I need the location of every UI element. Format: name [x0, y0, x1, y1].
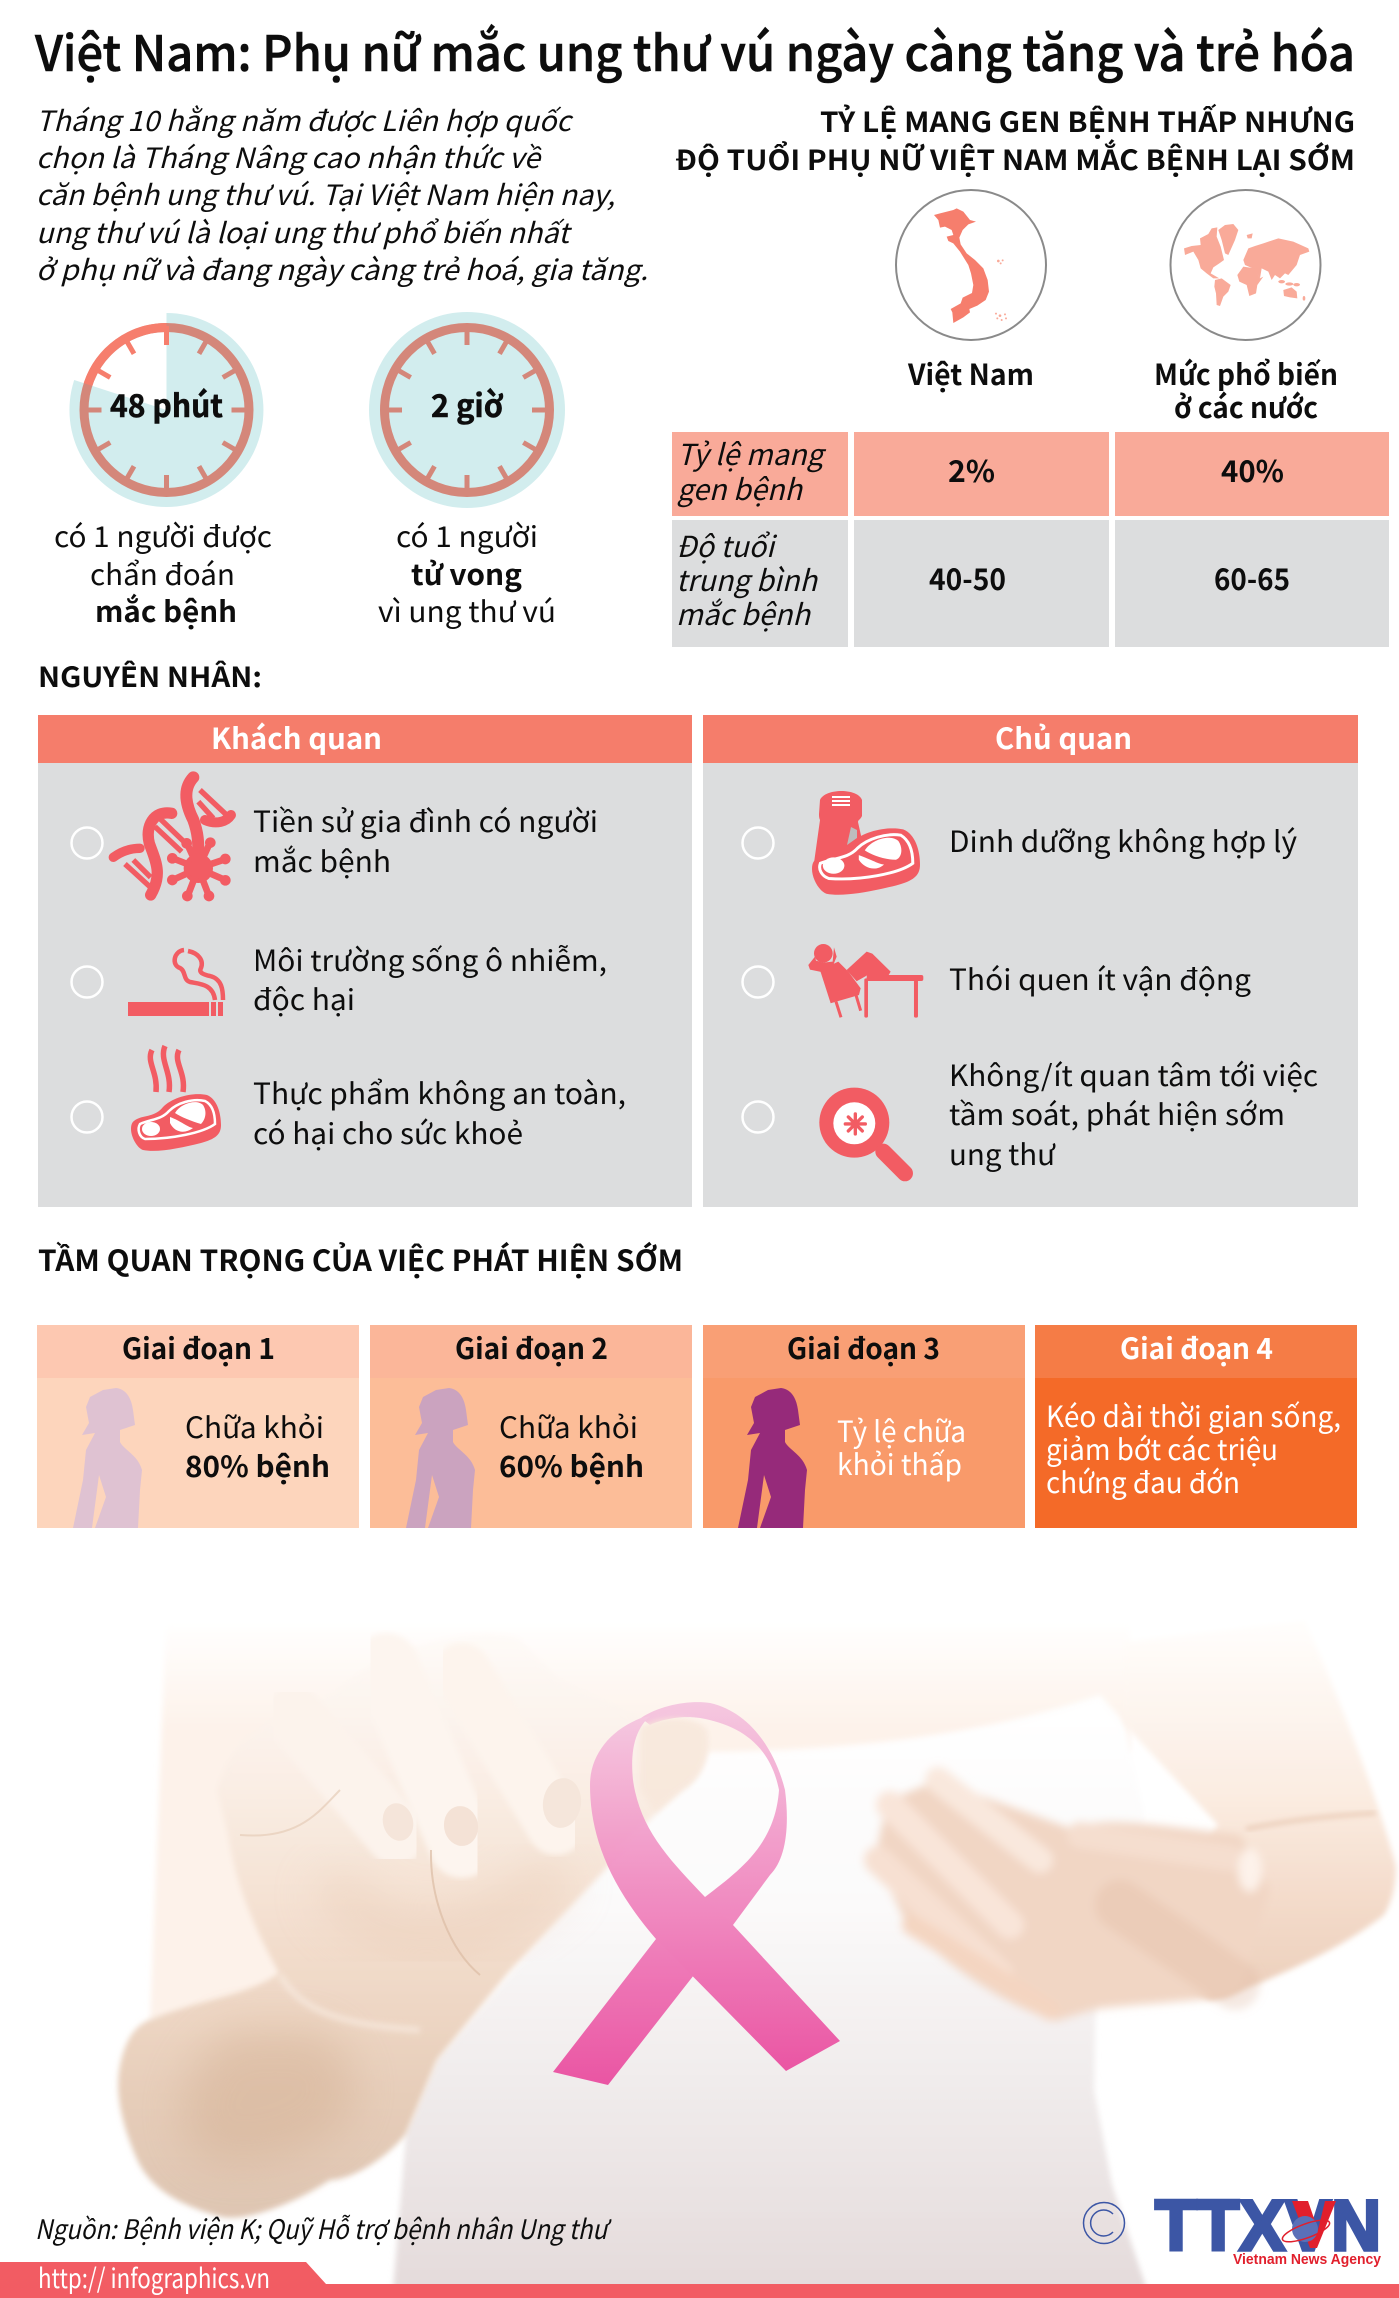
- row: gene rate: Tỷ lệ mang: [677, 432, 827, 474]
- intro text block: Tháng 10 hằng năm được Liên hợp quốc: [36, 100, 574, 140]
- footer bar with url tab: http:// infographics.vn: [38, 2257, 270, 2296]
- row: average age: mắc bệnh: [676, 592, 811, 634]
- panel: stage 2: 60% bệnh: [499, 1444, 644, 1486]
- icon: hot steak: [131, 1046, 221, 1151]
- caption: 2 hours: tử vong: [411, 552, 522, 594]
- causes text: Thực phẩm không an toàn,: [253, 1071, 626, 1113]
- panel: stage 2: [370, 1325, 692, 1528]
- intro text block: [36, 100, 648, 289]
- causes text: Không/ít quan tâm tới việc: [949, 1053, 1318, 1095]
- icon: person lounging at desk: [808, 944, 923, 1018]
- photo: right hand on chest: [875, 1780, 1270, 2021]
- intro text block: căn bệnh ung thư vú. Tại Việt Nam hiện nay,: [36, 174, 615, 214]
- clock: 48 minutes: [69, 313, 263, 507]
- row: gene rate: 40%: [1221, 447, 1284, 491]
- intro text block: ung thư vú là loại ung thư phổ biến nhất: [36, 212, 573, 252]
- caption: 2 hours: [378, 514, 556, 631]
- causes text: Môi trường sống ô nhiễm,: [253, 938, 607, 980]
- icon: world map in circle: [1170, 190, 1320, 340]
- heading: early detection importance: TẦM QUAN TRỌNG CỦA VIỆC PHÁT HIỆN SỚM: [38, 1238, 683, 1280]
- background photo: hand holding pink ribbon: [118, 1620, 1396, 2290]
- icon: woman silhouette: [738, 1388, 807, 1528]
- panel: stage 2: Chữa khỏi: [499, 1405, 638, 1447]
- panel: stage 4: giảm bớt các triệu: [1046, 1427, 1278, 1469]
- caption: 48 minutes: chẩn đoán: [90, 552, 235, 594]
- column label: global prevalence: ở các nước: [1174, 385, 1318, 427]
- panel: stage 4: Giai đoạn 4: [1120, 1326, 1273, 1368]
- photo: right arm: [1123, 1621, 1396, 2000]
- photo: pink awareness ribbon: [553, 1702, 840, 2085]
- intro text block: ở phụ nữ và đang ngày càng trẻ hoá, gia tăng.: [36, 249, 648, 289]
- panel: stage 3: [703, 1325, 1025, 1528]
- footer bar with url tab: [0, 2257, 1399, 2298]
- caption: 2 hours: vì ung thư vú: [378, 589, 556, 631]
- intro text block: chọn là Tháng Nâng cao nhận thức về: [36, 137, 543, 177]
- panel: objective causes: Khách quan: [211, 716, 382, 758]
- panel: stage 1: Chữa khỏi: [185, 1405, 324, 1447]
- row: average age: Độ tuổi: [676, 524, 778, 566]
- panel: stage 3: khỏi thấp: [837, 1442, 962, 1484]
- column label: Vietnam: Việt Nam: [907, 352, 1034, 394]
- causes text: [949, 819, 1318, 1174]
- row: average age: [672, 520, 1389, 647]
- comparison table: [672, 432, 1389, 647]
- icon: Vietnam map in circle: [896, 190, 1046, 340]
- causes text: mắc bệnh: [253, 839, 391, 881]
- copyright mark: [1084, 2202, 1124, 2244]
- icon: cigarette: [128, 950, 223, 1016]
- causes text: Dinh dưỡng không hợp lý: [949, 819, 1297, 861]
- row: gene rate: gen bệnh: [677, 467, 803, 509]
- caption: 48 minutes: [54, 514, 272, 631]
- column label: global prevalence: Mức phổ biến: [1154, 352, 1338, 394]
- logo: TTXVN Vietnam News Agency: Vietnam News Agency: [1233, 2251, 1382, 2268]
- source note: Nguồn: Bệnh viện K; Quỹ Hỗ trợ bệnh nhân Ung thư: [35, 2208, 612, 2247]
- panel: stage 1: 80% bệnh: [185, 1444, 330, 1486]
- clock: 2 hours: [369, 312, 565, 508]
- row: gene rate: 2%: [948, 447, 995, 491]
- heading: gene rate vs age: TỶ LỆ MANG GEN BỆNH THẤP NHƯNG: [820, 101, 1355, 141]
- photo: wrist crease on arm: [1246, 1813, 1376, 1829]
- heading: gene rate vs age: ĐỘ TUỔI PHỤ NỮ VIỆT NAM MẮC BỆNH LẠI SỚM: [675, 138, 1355, 179]
- row: average age: 60-65: [1214, 555, 1290, 599]
- panel: stage 2: Giai đoạn 2: [455, 1326, 608, 1368]
- panel: stage 4: chứng đau đớn: [1046, 1460, 1240, 1502]
- photo: torso in white top: [393, 1695, 1147, 2290]
- row: average age: trung bình: [676, 558, 818, 600]
- caption: 48 minutes: mắc bệnh: [95, 589, 237, 631]
- panel: stage 1: [37, 1325, 359, 1528]
- row: average age: 40-50: [929, 555, 1006, 599]
- panel: objective causes: [38, 715, 692, 1207]
- icon: woman silhouette: [73, 1388, 142, 1528]
- photo: left hand and forearm: [118, 1634, 708, 2218]
- heading: gene rate vs age: [675, 101, 1355, 179]
- heading: causes: NGUYÊN NHÂN:: [38, 656, 262, 696]
- caption: 48 minutes: có 1 người được: [54, 514, 272, 556]
- causes text: [253, 799, 626, 1153]
- icon: DNA and virus: [113, 777, 231, 901]
- panel: stage 3: Tỷ lệ chữa: [837, 1409, 966, 1451]
- icon: woman silhouette: [406, 1388, 475, 1528]
- causes text: có hại cho sức khoẻ: [253, 1111, 523, 1153]
- column label: global prevalence: [1154, 352, 1338, 427]
- title: Việt Nam: Phụ nữ mắc ung thư vú ngày càng tăng và trẻ hóa: [34, 15, 1355, 86]
- causes text: Thói quen ít vận động: [949, 957, 1251, 999]
- panel: stage 4: Kéo dài thời gian sống,: [1046, 1394, 1341, 1436]
- panel: subjective causes: Chủ quan: [995, 716, 1132, 758]
- row: gene rate: [672, 432, 1389, 516]
- caption: 2 hours: có 1 người: [396, 514, 538, 556]
- panel: subjective causes: [703, 715, 1358, 1207]
- causes text: độc hại: [253, 977, 355, 1019]
- clock: 2 hours: 2 giờ: [431, 381, 504, 426]
- logo: TTXVN Vietnam News Agency: TTXVN: [1155, 2187, 1381, 2266]
- panel: stage 3: Giai đoạn 3: [787, 1326, 940, 1368]
- causes text: ung thư: [949, 1132, 1056, 1174]
- icon: salt shaker and steak: [812, 791, 920, 895]
- panel: stage 1: Giai đoạn 1: [122, 1326, 275, 1368]
- clock: 48 minutes: 48 phút: [110, 381, 223, 426]
- causes text: Tiền sử gia đình có người: [253, 799, 598, 841]
- icon: magnifier over cell: [819, 1088, 905, 1173]
- panel: stage 4: [1035, 1325, 1357, 1528]
- causes text: tầm soát, phát hiện sớm: [949, 1092, 1285, 1134]
- photo: pale shoulder background: [150, 1620, 1130, 2020]
